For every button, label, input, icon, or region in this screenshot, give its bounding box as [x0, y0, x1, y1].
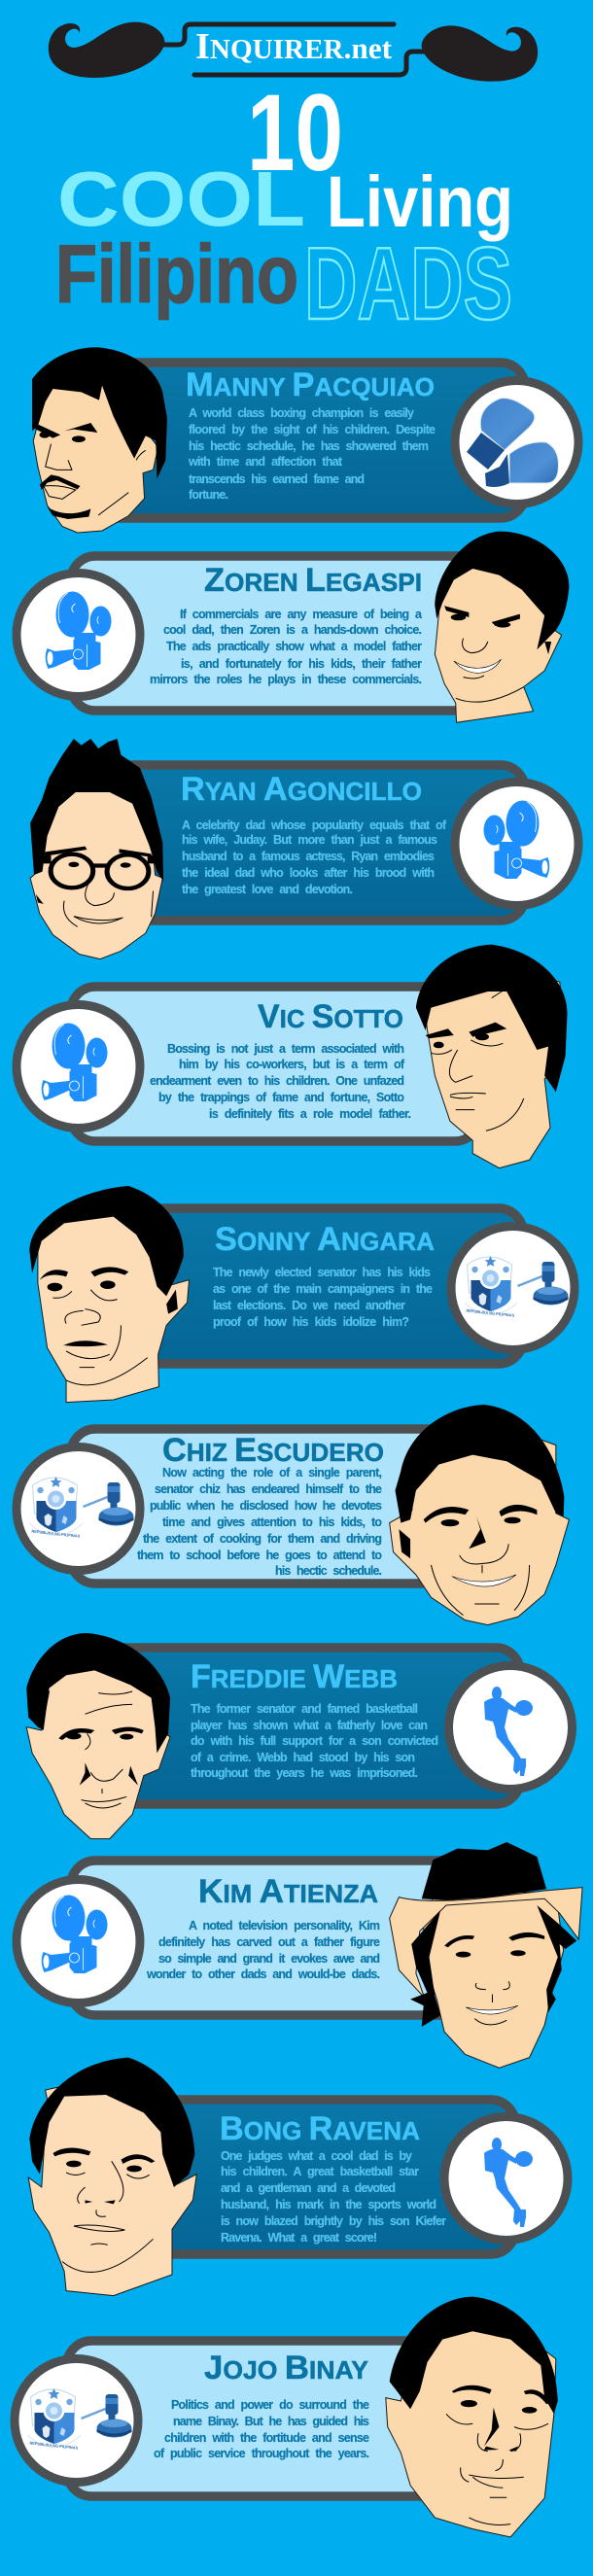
portrait: Kim Atienza [390, 1842, 582, 2068]
card frame [67, 2341, 457, 2496]
description: Politics and power do surround the [171, 2398, 369, 2412]
description: Bossing is not just a term associated with [167, 1042, 404, 1056]
description: public when he disclosed how he devotes [150, 1499, 382, 1513]
description: the ideal dad who looks after his brood with [182, 866, 435, 880]
icon circle: basketball player [444, 2117, 568, 2240]
description: If commercials are any measure of being a [180, 608, 423, 621]
panel: Vic Sotto [17, 945, 568, 1168]
description: is, and fortunately for his kids, their father [181, 657, 422, 671]
description [221, 2149, 446, 2245]
description [150, 1042, 411, 1121]
description: the greatest love and devotion. [182, 883, 353, 896]
description: his hectic schedule, he has showered them [189, 439, 429, 453]
description: player has shown what a fatherly love can [191, 1719, 428, 1732]
panel: Ryan Agoncillo [30, 739, 578, 959]
logo: Inquirer.net moustache header [49, 22, 538, 82]
portrait: Ryan Agoncillo [30, 739, 163, 959]
name: JOJO BINAY [204, 2350, 368, 2386]
description: so simple and grand it evokes awe and [158, 1952, 380, 1966]
card frame [87, 363, 525, 518]
description [182, 818, 447, 896]
logo wordmark: INQUIRER.net [195, 26, 393, 67]
portrait: Manny Pacquiao [32, 347, 167, 533]
description: mirrors the roles he plays in these commercials. [150, 673, 422, 686]
icon: right moustache [422, 25, 538, 82]
name: ZOREN LEGASPI [204, 562, 422, 599]
description: wonder to other dads and would-be dads. [146, 1967, 380, 1981]
description: with time and affection that [188, 455, 343, 469]
description: A noted television personality, Kim [189, 1919, 380, 1932]
description [150, 608, 423, 686]
icon circle: boxing gloves [455, 381, 578, 504]
icon circle: film camera [17, 574, 140, 696]
card frame [97, 2100, 515, 2254]
description: do with his full support for a son convicted [191, 1734, 438, 1748]
panel: Manny Pacquiao [32, 347, 578, 533]
card frame [87, 1648, 520, 1804]
description: husband to a famous actress, Ryan embodies [182, 850, 435, 863]
name: KIM ATIENZA [198, 1873, 378, 1910]
name: FREDDIE WEBB [191, 1658, 398, 1695]
description: A celebrity dad whose popularity equals that of [182, 818, 447, 832]
icon circle: seal and gavel [451, 1227, 575, 1349]
description: as one of the main campaigners in the [213, 1282, 433, 1296]
icon circle: basketball player [449, 1666, 572, 1789]
card frame [71, 987, 479, 1141]
icon circle: seal and gavel [17, 1446, 140, 1571]
title: 10: 10 [247, 72, 343, 193]
description: husband, his mark in the sports world [221, 2198, 436, 2211]
description: The newly elected senator has his kids [213, 1266, 431, 1279]
portrait: Sonny Angara [29, 1186, 190, 1403]
description [191, 1702, 438, 1780]
portrait: Zoren Legaspi [435, 532, 569, 722]
description: last elections. Do we need another [213, 1299, 405, 1312]
name: CHIZ ESCUDERO [162, 1432, 384, 1469]
description: proof of how his kids idolize him? [213, 1315, 409, 1329]
title: living: Living [327, 161, 513, 242]
description: by the trappings of fame and fortune, Sotto [158, 1091, 404, 1104]
description: floored by the sight of his children. Despite [189, 423, 436, 436]
description [146, 1919, 380, 1981]
description: his hectic schedule. [275, 1564, 382, 1578]
name: MANNY PACQUIAO [186, 366, 435, 403]
description: his wife, Juday. But more than just a famous [182, 833, 437, 847]
name: SONNY ANGARA [215, 1221, 435, 1258]
description: cool dad, then Zoren is a hands-down choice. [163, 623, 422, 637]
name: BONG RAVENA [220, 2110, 420, 2147]
description: The ads practically show what a model father [166, 640, 422, 653]
name: VIC SOTTO [258, 998, 403, 1035]
panel: Freddie Webb [26, 1633, 573, 1839]
title: cool: COOL [57, 156, 305, 242]
description: definitely has carved out a father figure [158, 1935, 380, 1949]
description: the extent of cooking for them and driving [143, 1532, 382, 1546]
icon circle: seal and gavel [15, 2358, 138, 2483]
panel: Zoren Legaspi [17, 532, 569, 722]
description [137, 1466, 382, 1578]
description [188, 406, 436, 502]
description: Now acting the role of a single parent, [162, 1466, 382, 1479]
description [154, 2398, 369, 2460]
description: Ravena. What a great score! [221, 2231, 377, 2245]
description: of a crime. Webb had stood by his son [191, 1751, 415, 1764]
card frame [87, 765, 525, 921]
description: of public service throughout the years. [154, 2447, 369, 2460]
title [55, 72, 513, 341]
portrait: Jojo Binay [386, 2297, 558, 2537]
description: time and gives attention to his kids, to [162, 1515, 382, 1529]
description: him by his co-workers, but is a term of [179, 1058, 405, 1071]
description: endearment even to his children. One unfazed [150, 1074, 404, 1088]
description: senator chiz has endeared himself to the [155, 1482, 382, 1496]
description: his children. A great basketball star [221, 2165, 419, 2178]
title: dads: DADS [304, 226, 512, 341]
name: RYAN AGONCILLO [181, 771, 422, 808]
panel: Sonny Angara [29, 1186, 575, 1403]
description: them to school before he goes to attend to [137, 1549, 382, 1562]
panel: Kim Atienza [17, 1842, 582, 2068]
description: A world class boxing champion is easily [189, 406, 414, 420]
description: children with the fortitude and sense [164, 2431, 369, 2445]
card frame [97, 1208, 523, 1364]
icon circle: film camera [17, 1005, 140, 1128]
description [213, 1266, 433, 1329]
title: filipino: Filipino [55, 228, 298, 320]
card frame [71, 1429, 470, 1584]
panel: Jojo Binay [15, 2297, 558, 2537]
description: name Binay. But he has guided his [173, 2415, 369, 2428]
panel: Bong Ravena [28, 2058, 568, 2296]
icon: left moustache [49, 22, 164, 78]
icon circle: film camera [17, 1880, 140, 2002]
description: transcends his earned fame and [189, 472, 365, 486]
icon circle: film camera [455, 782, 578, 906]
card frame [71, 556, 489, 711]
portrait: Freddie Webb [26, 1633, 170, 1839]
description: is definitely fits a role model father. [209, 1107, 411, 1121]
card frame [71, 1861, 470, 2015]
description: The former senator and famed basketball [191, 1702, 418, 1716]
portrait: Chiz Escudero [390, 1405, 569, 1625]
description: is now blazed brightly by his son Kiefer [221, 2214, 446, 2228]
description: and a gentleman and a devoted [221, 2181, 396, 2195]
panel: Chiz Escudero [17, 1405, 569, 1625]
portrait: Vic Sotto [416, 945, 568, 1168]
description: fortune. [189, 488, 228, 502]
description: One judges what a cool dad is by [221, 2149, 412, 2163]
portrait: Bong Ravena [28, 2058, 196, 2296]
description: throughout the years he was imprisoned. [191, 1766, 418, 1780]
